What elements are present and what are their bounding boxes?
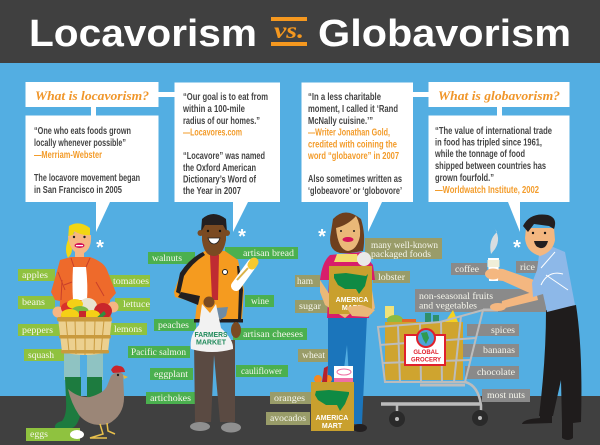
- panel: Rand McNally quote: Also sometimes written as: [308, 173, 402, 185]
- panel: locavores.com quote: Dictionary’s Word of: [183, 174, 256, 186]
- face: [68, 231, 91, 254]
- labels: packaged foods: avocados: [270, 414, 306, 424]
- head: [525, 228, 555, 256]
- panel: worldwatch quote: [428, 116, 570, 232]
- face: [336, 216, 360, 251]
- panel: locavores.com quote: the Oxford American: [183, 162, 256, 174]
- hand on cart: [490, 303, 506, 311]
- carried bag: America Mart: MART: [342, 305, 363, 312]
- floor bag: America Mart: AMERICA: [316, 415, 348, 422]
- panel: locavores.com quote: within a 100-mile: [182, 103, 245, 115]
- hands: [52, 306, 64, 318]
- title: Globavorism: Globavorism: [318, 13, 571, 55]
- basket of produce: [57, 298, 112, 355]
- panel: worldwatch quote: shipped between countries has: [435, 160, 546, 172]
- panel: worldwatch quote: grown fourfold.”: [435, 172, 494, 184]
- labels: farmers market: eggplant: [154, 370, 188, 380]
- panel: locavore definition: locally whenever possible”: [34, 137, 126, 149]
- shopping cart: [378, 306, 498, 427]
- jacket: [51, 257, 116, 325]
- labels: farmers market: wine: [251, 297, 269, 307]
- baguette: [236, 262, 254, 286]
- labels: global goods: and vegetables: [419, 302, 477, 312]
- panel: what is globavorism heading: What is globavorism?: [438, 88, 561, 103]
- labels: local produce: beans: [22, 298, 45, 308]
- labels: farmers market: peaches: [158, 321, 189, 331]
- panel: locavores.com quote: the Year in 2007: [183, 185, 241, 197]
- hen: [68, 366, 128, 438]
- labels: global goods: bananas: [483, 346, 515, 356]
- panel: locavores.com quote: —Locavores.com: [183, 126, 242, 138]
- tote bag: farmers market: MARKET: [196, 340, 227, 346]
- panel: locavore definition: in San Francisco in 2005: [34, 184, 122, 196]
- labels: packaged foods: oranges: [274, 394, 305, 404]
- asterisks: *: [318, 226, 326, 248]
- fish: [215, 307, 228, 320]
- panel: Rand McNally quote: McNally cuisine.’”: [308, 115, 373, 127]
- panel: Rand McNally quote: —Writer Jonathan Gold,: [308, 126, 390, 138]
- labels: local produce: eggs: [30, 430, 48, 440]
- labels: packaged foods: packaged foods: [371, 249, 431, 260]
- floor bag: America Mart: [311, 366, 354, 431]
- labels: local produce: lemons: [114, 325, 142, 335]
- shoes: [522, 414, 552, 424]
- asterisks: *: [238, 226, 246, 248]
- labels: packaged foods: lobster: [378, 273, 406, 283]
- panel: Rand McNally quote: ‘globeavore’ or ‘globovore’: [308, 185, 402, 197]
- arms: [320, 280, 352, 318]
- panel: Rand McNally quote: “In a less charitable: [308, 91, 381, 103]
- panel: locavores.com quote: “Locavore” was named: [183, 150, 265, 162]
- hair: [330, 212, 364, 253]
- panel: what is globavorism heading: [413, 82, 570, 116]
- ponytail and hair: [66, 223, 90, 258]
- labels: packaged foods: ham: [297, 277, 314, 287]
- panel: locavore definition: The locavore movement began: [34, 172, 140, 184]
- floor bag: America Mart: MART: [322, 423, 343, 430]
- steam: [490, 226, 498, 254]
- asterisks: *: [96, 237, 104, 259]
- trousers: [539, 305, 581, 423]
- labels: global goods: rice: [520, 263, 535, 273]
- labels: global goods: [415, 261, 546, 402]
- labels: farmers market: artisan cheeses: [243, 330, 303, 340]
- global grocery sign: [405, 328, 445, 365]
- panel: locavore definition: [26, 116, 158, 232]
- labels: local produce: lettuce: [123, 300, 150, 310]
- labels: local produce: apples: [22, 271, 48, 281]
- labels: farmers market: Pacific salmon: [131, 347, 186, 358]
- cart groceries: [385, 306, 463, 380]
- labels: local produce: tomatoes: [113, 277, 149, 287]
- vs. badge: vs.: [274, 18, 304, 43]
- panel: locavores.com quote: “Our goal is to eat from: [183, 91, 268, 103]
- panel: worldwatch quote: —Worldwatch Institute, 2002: [435, 184, 539, 196]
- jacket: [174, 251, 244, 320]
- background: blue wall: [0, 63, 600, 396]
- labels: farmers market: artisan bread: [243, 249, 294, 259]
- legs: [64, 350, 80, 380]
- panel: locavores.com quote: radius of our homes.”: [183, 115, 260, 127]
- panel: what is locavorism heading: What is locavorism?: [35, 88, 150, 103]
- labels: global goods: chocolate: [477, 368, 515, 378]
- arms: [501, 291, 538, 309]
- shoes: [190, 422, 210, 431]
- asterisks: *: [513, 237, 521, 259]
- tote bag: farmers market: FARMERS: [194, 332, 228, 339]
- boots: [55, 377, 81, 428]
- labels: local produce: peppers: [22, 326, 53, 336]
- panel: Rand McNally quote: moment, I called it ‘Rand: [308, 103, 398, 115]
- labels: packaged foods: many well-known: [371, 241, 438, 251]
- labels: global goods: non-seasonal fruits: [419, 291, 493, 302]
- labels: packaged foods: wheat: [302, 351, 325, 361]
- figure: woman with basket: [51, 223, 128, 439]
- labels: packaged foods: sugar: [299, 302, 322, 312]
- labels: farmers market: walnuts: [152, 254, 182, 264]
- global grocery sign: GROCERY: [411, 358, 441, 364]
- global grocery sign: GLOBAL: [413, 350, 439, 356]
- hands: [204, 296, 214, 308]
- top: [320, 252, 375, 318]
- tote bag: farmers market: [191, 304, 233, 352]
- cart base: [381, 310, 498, 418]
- labels: farmers market: artichokes: [150, 394, 191, 404]
- egg: [70, 430, 84, 439]
- panel: locavores.com quote: [174, 82, 280, 232]
- panel: locavore definition: —Merriam-Webster: [34, 149, 102, 161]
- jeans: [328, 316, 367, 424]
- cart basket: [378, 310, 483, 382]
- figure: woman with America Mart bags: [311, 212, 375, 432]
- panel: Rand McNally quote: [302, 82, 413, 232]
- panel: Rand McNally quote: credited with coining the: [308, 138, 397, 150]
- labels: global goods: coffee: [455, 264, 479, 275]
- panel: locavore definition: “One who eats foods grown: [34, 125, 131, 137]
- panel: worldwatch quote: “The value of international trade: [435, 125, 552, 137]
- labels: local produce: [18, 269, 150, 441]
- labels: packaged foods: [266, 238, 442, 425]
- asterisks: [96, 226, 521, 259]
- floor: [0, 396, 600, 445]
- cart wheels: [389, 411, 405, 427]
- panel: what is locavorism heading: [26, 82, 175, 116]
- panel: worldwatch quote: in food has tripled since 1961,: [435, 136, 542, 148]
- head: [202, 217, 226, 256]
- title: Locavorism: Locavorism: [29, 13, 257, 55]
- labels: local produce: squash: [28, 351, 54, 361]
- carried bag: America Mart: [329, 252, 375, 317]
- coffee cup and hand: [485, 258, 501, 281]
- panel: Rand McNally quote: word “globavore” in 2007: [307, 150, 399, 162]
- labels: global goods: most nuts: [487, 391, 525, 401]
- figure: man with coffee and cart: [485, 214, 581, 440]
- header banner: [0, 0, 600, 63]
- carried bag: America Mart: AMERICA: [336, 297, 368, 304]
- vs. badge: [271, 17, 307, 46]
- shoe: [353, 424, 367, 432]
- panel: worldwatch quote: while the tonnage of food: [434, 148, 525, 160]
- legs: [194, 340, 235, 422]
- shirt: [532, 247, 575, 312]
- labels: farmers market: [128, 247, 307, 404]
- figure: farmer's market man: [174, 214, 254, 432]
- labels: global goods: spices: [491, 326, 515, 336]
- labels: farmers market: cauliflower: [241, 366, 283, 377]
